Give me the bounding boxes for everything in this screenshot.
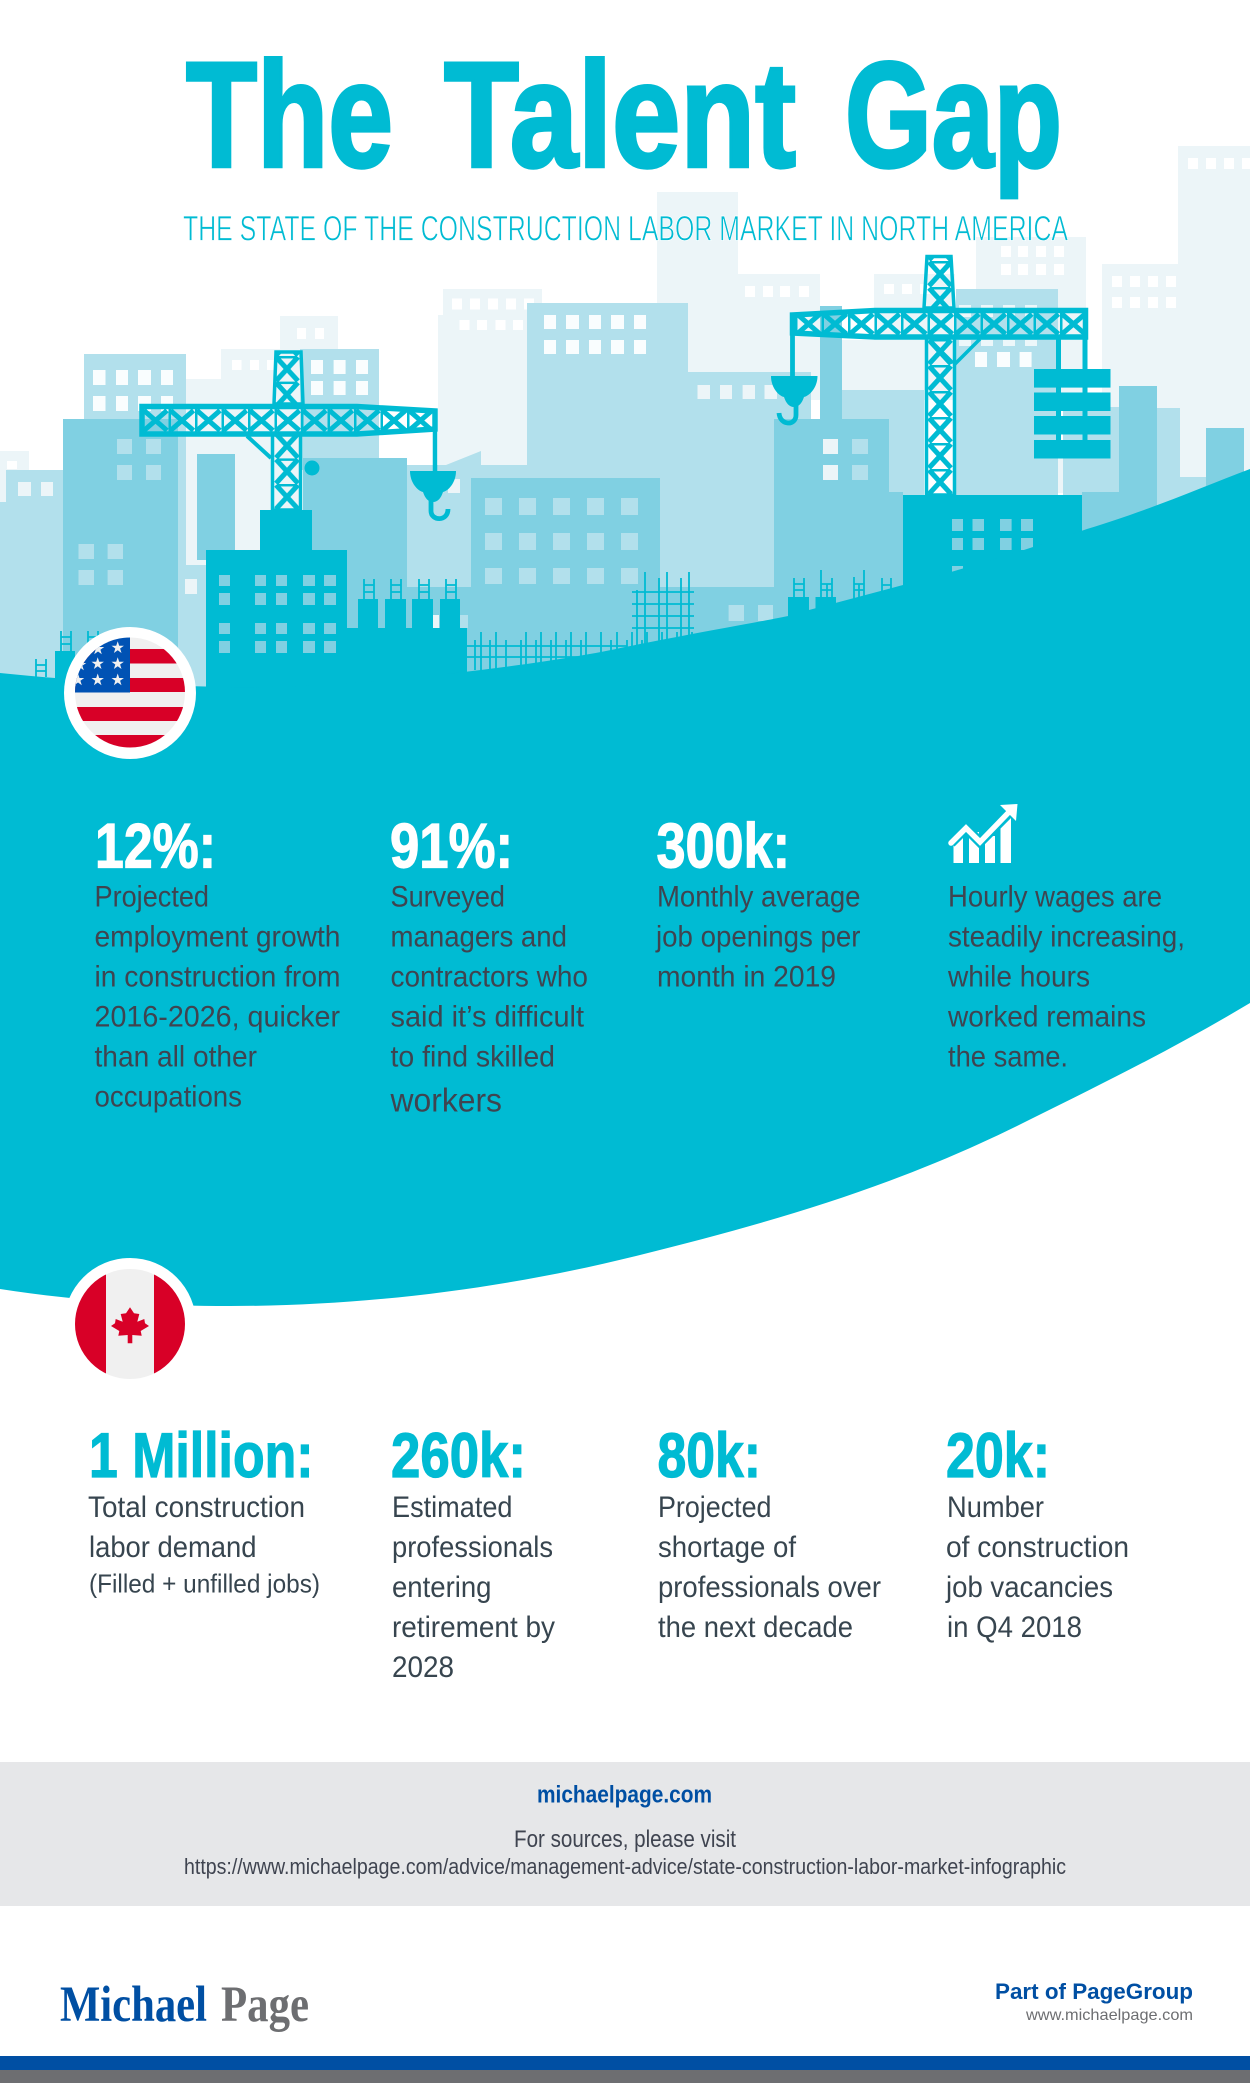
stat: 300k: Monthly average	[657, 881, 860, 914]
crane load: stacked blocks	[1034, 339, 1110, 458]
stat: 12%: occupations	[94, 1081, 242, 1114]
stat: 80k: Projected	[658, 1491, 772, 1524]
stat: 12%: 12%:	[95, 812, 216, 882]
crane hook	[771, 335, 818, 423]
stat: 91%: workers	[390, 1082, 502, 1119]
stat: 300k	[655, 812, 861, 994]
crane counterweight dot	[304, 460, 320, 476]
stat: 260k: Estimated	[392, 1491, 512, 1524]
stat: 260k	[391, 1421, 555, 1684]
text: part of PageGroup: www.michaelpage.com	[1025, 2007, 1193, 2024]
logo: Michael Page: Page	[221, 1977, 309, 2033]
stat: 91%: managers and	[390, 921, 567, 954]
stat: 20k: 20k:	[946, 1421, 1050, 1491]
text: part of PageGroup	[995, 1979, 1193, 2024]
title	[186, 30, 1062, 198]
stat: 260k: 2028	[392, 1651, 454, 1684]
stat: 1 Million: labor demand	[89, 1531, 256, 1564]
stat: 12%: than all other	[94, 1041, 257, 1074]
stat: 80k: 80k:	[658, 1421, 761, 1491]
panel: sources band: michaelpage.com	[537, 1782, 712, 1809]
stat: 300k: job openings per	[655, 921, 861, 954]
stat: 91%	[390, 812, 588, 1119]
stat: 260k: entering	[392, 1571, 492, 1604]
illustration: scaffolding and ladders	[36, 570, 891, 677]
stat: 80k: shortage of	[658, 1531, 797, 1564]
illustration: city skyline background	[0, 146, 1250, 700]
stat: 12%	[94, 812, 340, 1114]
stat: 12%: Projected	[94, 881, 209, 914]
panel: sources band: For sources, please visit	[514, 1826, 736, 1853]
stat: 20k: of construction	[946, 1531, 1129, 1564]
stat: 91%: Surveyed	[390, 881, 505, 914]
stat: hourly wages	[947, 804, 1185, 1074]
crane cable and hook	[410, 409, 456, 519]
stat: 1 Million: (Filled + unfilled jobs)	[89, 1569, 320, 1599]
stat: hourly wages: steadily increasing,	[948, 921, 1185, 954]
title: Talent	[444, 30, 796, 198]
stat: 91%: said it’s difficult	[390, 1001, 585, 1034]
stat: 20k: Number	[947, 1491, 1044, 1524]
panel: sources band	[0, 1762, 1250, 1906]
illustration: foreground buildings	[55, 495, 1082, 700]
stat: 300k: 300k:	[656, 812, 790, 882]
stat: 260k: retirement by	[392, 1611, 555, 1644]
stat: 12%: employment growth	[94, 921, 340, 954]
stat: 12%: 2016-2026, quicker	[94, 1001, 340, 1034]
stat: 1 Million	[88, 1421, 320, 1599]
stat: 260k: 260k:	[391, 1421, 526, 1491]
panel: USA teal wave	[0, 469, 1250, 1306]
stat: hourly wages: the same.	[948, 1041, 1068, 1074]
stat: 300k: month in 2019	[657, 961, 836, 994]
stat: 80k: professionals over	[658, 1571, 881, 1604]
stat: 80k: the next decade	[658, 1611, 853, 1644]
stat: 260k: professionals	[392, 1531, 553, 1564]
stat: hourly wages: Hourly wages are	[948, 881, 1162, 914]
stat: 1 Million: Total construction	[88, 1491, 305, 1524]
stat: 91%: 91%:	[390, 812, 513, 882]
stat: 1 Million: 1 Million:	[89, 1421, 314, 1491]
building windows	[219, 519, 1033, 653]
icon: Canada flag	[69, 1258, 194, 1379]
illustration: left crane	[142, 352, 456, 519]
stat: 91%: to find skilled	[390, 1041, 555, 1074]
stat: 12%: in construction from	[94, 961, 340, 994]
title: Gap	[845, 30, 1062, 198]
stat: 20k: job vacancies	[945, 1571, 1113, 1604]
stat: hourly wages: worked remains	[947, 1001, 1146, 1034]
stat: hourly wages: while hours	[947, 961, 1090, 994]
stat: 20k	[945, 1421, 1129, 1644]
stat: 20k: in Q4 2018	[947, 1611, 1082, 1644]
footer bars	[0, 2056, 1250, 2083]
stat: 80k	[658, 1421, 881, 1644]
icon: USA flag	[64, 627, 196, 759]
logo: Michael Page: Michael	[60, 1977, 207, 2033]
title: The	[186, 30, 393, 198]
icon: rising bar chart with arrow	[951, 804, 1018, 863]
panel: sources band: https://www.michaelpage.com/advice/management-advice/state-construction-labor-market-infographic	[184, 1854, 1066, 1879]
text: part of PageGroup: Part of PageGroup	[995, 1979, 1193, 2004]
illustration: right crane	[771, 256, 1110, 495]
stat: 91%: contractors who	[390, 961, 588, 994]
